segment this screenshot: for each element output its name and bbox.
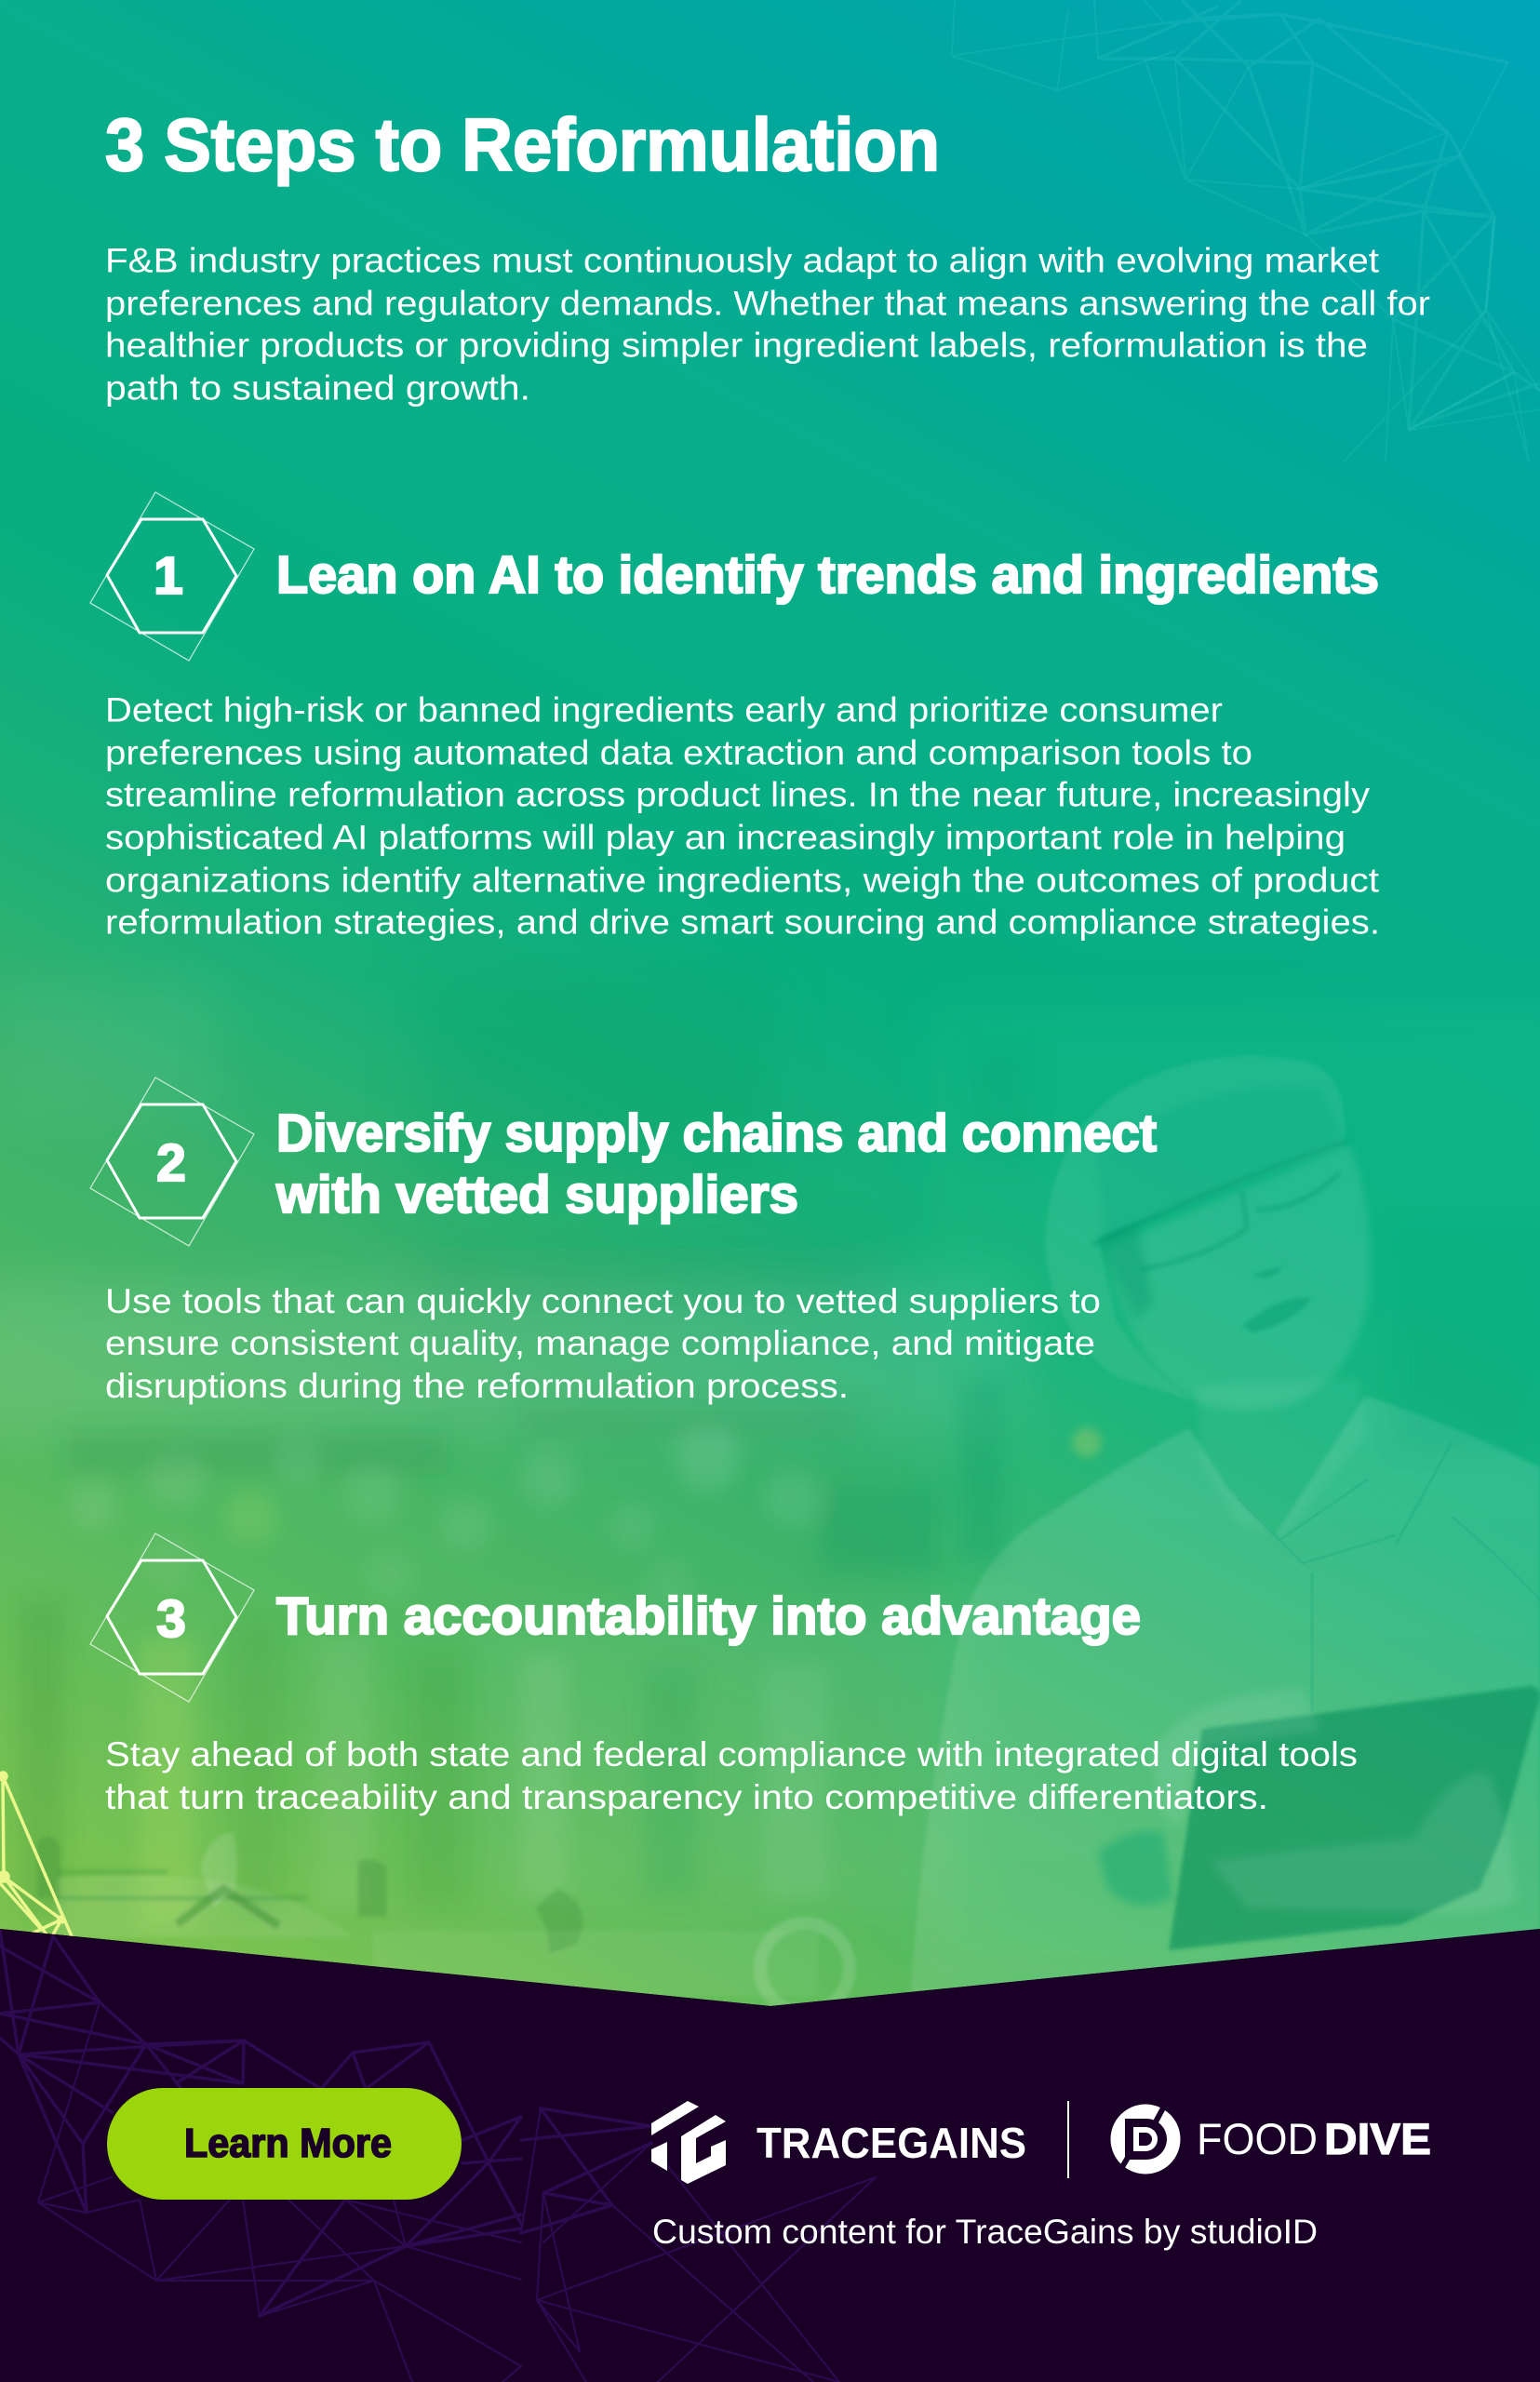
face: [1107, 1144, 1370, 1411]
panel: step 1: [90, 492, 1380, 942]
body: step 1: sophisticated AI platforms will play an increasingly important role in helping: [105, 819, 1346, 856]
body: step 3: that turn traceability and transparency into competitive differentiators.: [105, 1778, 1268, 1816]
body: step 3: [105, 1735, 1358, 1816]
intro paragraph: preferences and regulatory demands. Whether that means answering the call for: [105, 285, 1430, 322]
icon: hexagon 3: [90, 1533, 254, 1702]
safety glasses: [1093, 1141, 1348, 1270]
hair and ear shade: [1104, 1231, 1153, 1318]
hands: [1154, 1689, 1321, 1824]
logo: food dive: FOOD: [1197, 2114, 1318, 2163]
photo: scientist in hard hat holding a tablet: [909, 1042, 1540, 2010]
collar folds: [1238, 1442, 1540, 1712]
body: step 2: [105, 1282, 1101, 1405]
heading: step 2: with vetted suppliers: [275, 1165, 798, 1224]
panel: dark footer: [0, 1929, 1540, 2382]
intro paragraph: path to sustained growth.: [105, 368, 530, 408]
body: step 1: Detect high-risk or banned ingredients early and prioritize consumer: [105, 690, 1223, 729]
body: step 2: disruptions during the reformulation process.: [105, 1367, 849, 1405]
network pattern: footer: [0, 1931, 876, 2382]
body: step 3: Stay ahead of both state and federal compliance with integrated digital tools: [105, 1735, 1358, 1773]
body: step 2: Use tools that can quickly connect you to vetted suppliers to: [105, 1282, 1101, 1320]
button: learn more: [107, 2088, 462, 2200]
button: learn more: Learn More: [184, 2121, 392, 2166]
intro paragraph: [105, 242, 1430, 408]
logo: food dive: DIVE: [1324, 2114, 1431, 2163]
body: step 1: streamline reformulation across product lines. In the near future, increasingly: [105, 776, 1371, 813]
heading: step 2: [275, 1104, 1157, 1224]
logo: tracegains: TRACEGAINS: [757, 2119, 1026, 2167]
panel: step 3: [90, 1533, 1358, 1816]
sponsor caption: Custom content for TraceGains by studioID: [652, 2213, 1318, 2251]
blurred factory photo background: [0, 999, 1037, 1924]
intro paragraph: healthier products or providing simpler ingredient labels, reformulation is the: [105, 326, 1368, 365]
body: step 1: reformulation strategies, and drive smart sourcing and compliance strategies.: [105, 903, 1380, 942]
icon: hexagon 3: 3: [156, 1589, 186, 1649]
logo: food dive: [1111, 2103, 1431, 2174]
panel: step 2: [90, 1077, 1157, 1405]
logo: tracegains: [651, 2101, 1026, 2184]
icon: hexagon 1: 1: [154, 546, 183, 606]
body: step 1: [105, 690, 1380, 942]
icon: hexagon 2: 2: [156, 1133, 186, 1193]
intro paragraph: F&B industry practices must continuously adapt to align with evolving market: [105, 242, 1380, 279]
tablet: [1169, 1686, 1540, 1950]
icon: hexagon 2: [90, 1077, 254, 1246]
network pattern: top right: [952, 0, 1540, 462]
background panels by the head: [963, 1384, 1003, 1559]
body: step 2: ensure consistent quality, manage compliance, and mitigate: [105, 1324, 1095, 1362]
icon: hexagon 1: [90, 492, 254, 661]
network pattern: bottom left yellow: [0, 1773, 72, 1936]
body: step 1: organizations identify alternative ingredients, weigh the outcomes of product: [105, 862, 1380, 899]
heading: step 1: Lean on AI to identify trends and ingredients: [276, 545, 1379, 605]
heading: step 2: Diversify supply chains and connect: [276, 1104, 1157, 1163]
title: 3 Steps to Reformulation: [105, 103, 940, 186]
heading: step 3: Turn accountability into advantage: [276, 1586, 1141, 1646]
hard hat: [1045, 1056, 1345, 1400]
nose and mouth: [1242, 1265, 1312, 1332]
factory pipes and fittings: [37, 1831, 850, 2013]
shirt: [909, 1396, 1540, 2010]
body: step 1: preferences using automated data extraction and comparison tools to: [105, 733, 1252, 772]
divider: [1067, 2101, 1069, 2178]
neck: [1196, 1377, 1368, 1535]
